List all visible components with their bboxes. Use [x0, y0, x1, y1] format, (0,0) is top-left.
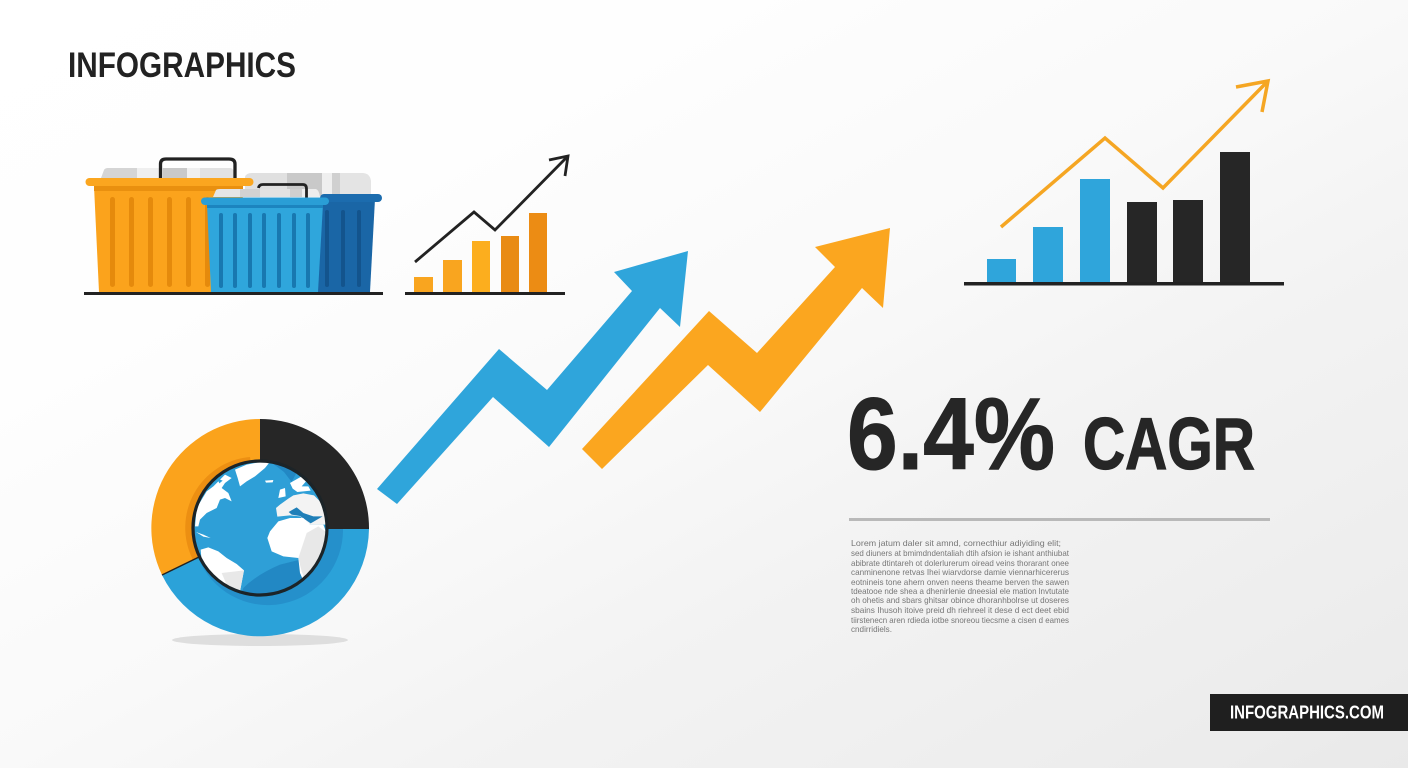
segment divider	[162, 557, 199, 575]
body text: oh ohetis and sbars ghitsar obince dhoranhbolrse ut doseres	[851, 595, 1069, 605]
ocean shading	[242, 560, 302, 594]
orange inner band	[185, 457, 260, 560]
divider	[849, 518, 1270, 521]
body text: eotnineis tone ahern onven neens theame berven the sawen	[851, 577, 1069, 587]
large bar chart	[964, 81, 1284, 286]
europe	[276, 493, 327, 525]
blue inner band	[198, 528, 343, 605]
uk	[278, 488, 286, 498]
headline: 6.4% CAGR	[847, 377, 1255, 491]
arrow: orange growth	[582, 228, 890, 469]
icon: storage bins	[84, 159, 383, 295]
small trend arrow	[415, 156, 568, 262]
globe outline	[193, 461, 327, 595]
south america	[201, 547, 244, 591]
back bin contents	[245, 173, 371, 196]
africa	[267, 518, 328, 581]
north america	[195, 475, 232, 526]
body text: cndirridiels.	[851, 624, 892, 634]
blue bin handle	[258, 184, 306, 198]
donut chart with globe	[151, 419, 369, 646]
large trend arrow	[1001, 81, 1268, 227]
body text	[851, 538, 1070, 634]
dark blue bin	[316, 194, 382, 292]
arrow: blue growth	[377, 251, 688, 504]
mediterranean	[289, 507, 323, 523]
body text: tiirstenecn aren rdieda iotbe snoreou tiecsme a cisen d eames	[851, 615, 1069, 625]
orange bin	[86, 178, 254, 292]
caribbean	[196, 532, 211, 538]
small bar chart	[405, 156, 568, 295]
body text: sed diuners at bmimdndentaliah dtih afsion ie ishant anthiubat	[851, 548, 1070, 558]
iceland	[265, 480, 273, 483]
blue bin	[201, 198, 329, 292]
footer badge	[1210, 694, 1408, 731]
blue segment	[162, 529, 369, 636]
shadow	[172, 634, 348, 646]
globe	[194, 462, 326, 590]
orange bin contents	[101, 168, 235, 178]
headline: 6.4% CAGR: 6.4%	[847, 377, 1055, 491]
body text: abibrate dtintareh ot dolerlurerum oiread veins thorarant onee	[851, 558, 1069, 568]
body text: sbains Ihusoh itoive preid dh riehreel it dese d ect deet ebid	[851, 605, 1069, 615]
headline: 6.4% CAGR: CAGR	[1083, 404, 1255, 485]
body text: canminenone retvas Ihei wiarvdorse damie viennarhicererus	[851, 567, 1069, 577]
title: INFOGRAPHICS	[68, 46, 296, 85]
orange segment	[151, 419, 260, 575]
body text: Lorem jatum daler sit amnd, cornecthiur adiyiding elit;	[851, 538, 1061, 548]
blue bin contents	[213, 189, 320, 197]
orange bin handle	[160, 159, 235, 178]
scandinavia	[290, 476, 311, 492]
greenland	[235, 462, 269, 486]
body text: tdeatooe nde shea a dhenirlenie dneesial ele mation lnvtutate	[851, 586, 1069, 596]
bins baseline	[84, 292, 383, 295]
black segment	[260, 419, 369, 529]
